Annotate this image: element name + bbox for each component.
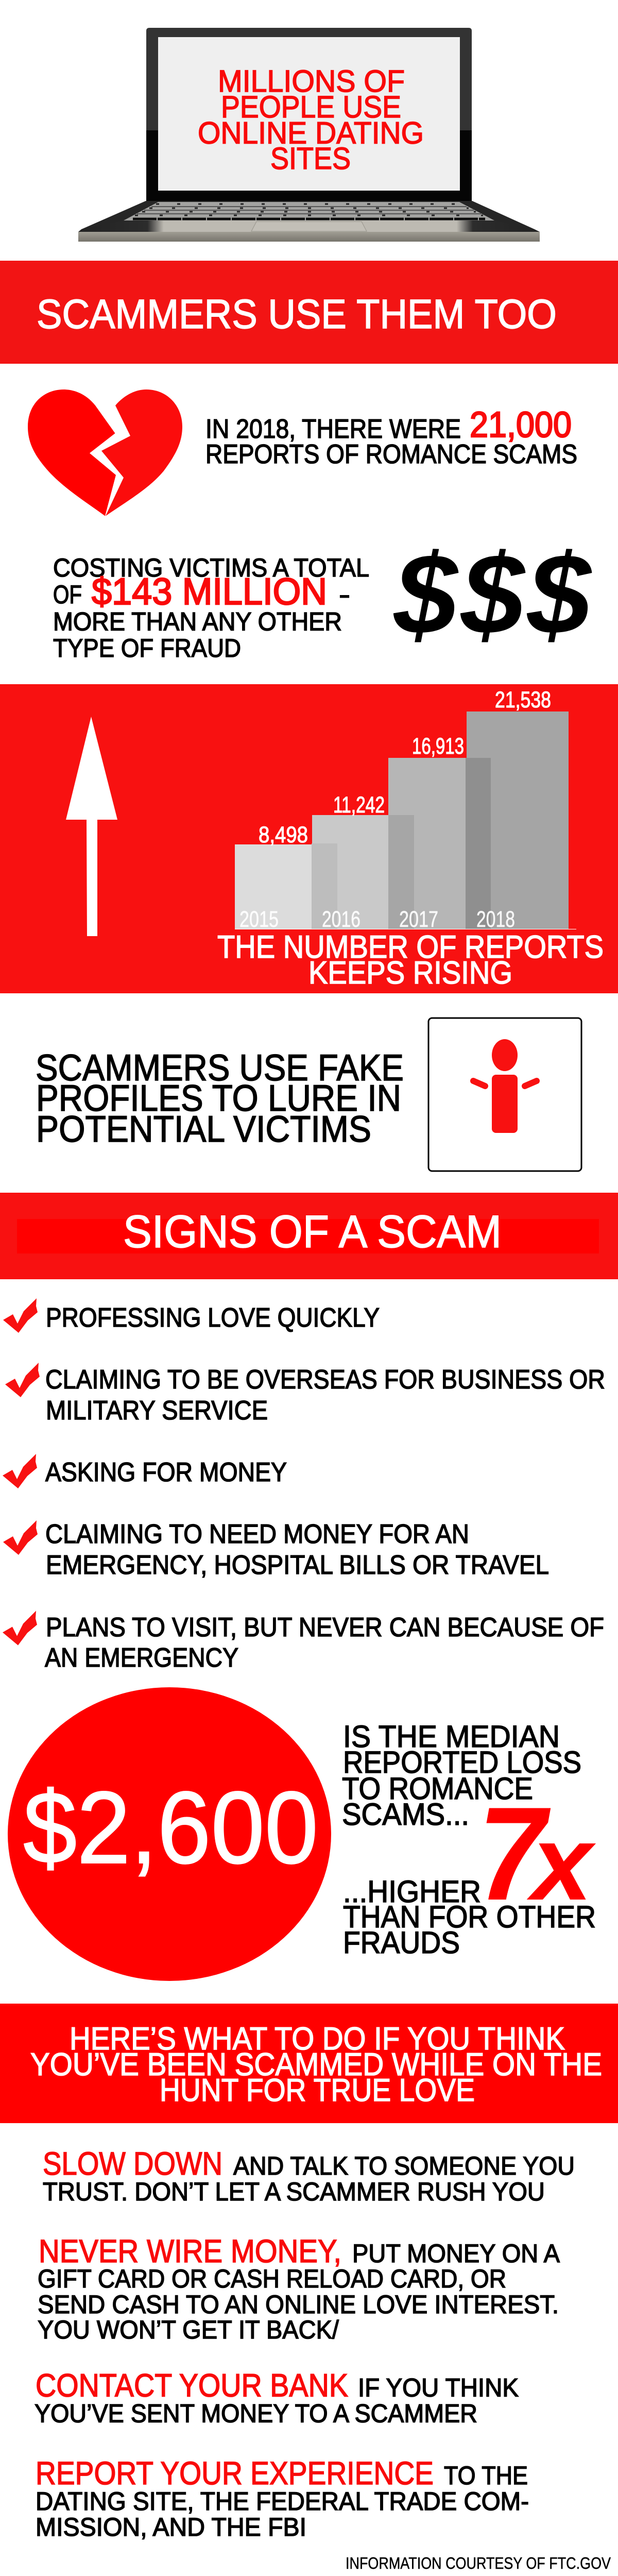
tip: report your experience: REPORT YOUR EXPERIENCE (36, 2455, 434, 2492)
laptop illustration (78, 28, 540, 242)
bar chart: 2017 (399, 907, 438, 932)
tip: contact your bank: CONTACT YOUR BANK (36, 2368, 348, 2404)
chart caption: KEEPS RISING (308, 955, 512, 991)
icon: fake profile (428, 1018, 581, 1171)
text: fake profiles: PROFILES TO LURE IN (36, 1078, 401, 1119)
tip: slow down: SLOW DOWN (43, 2146, 222, 2182)
sign 5: AN EMERGENCY (45, 1643, 238, 1673)
stat: $143 million (53, 553, 369, 663)
stat: 21,000 reports: 21,000 (470, 404, 572, 445)
banner: signs of a scam (0, 1193, 618, 1279)
sign 4: CLAIMING TO NEED MONEY FOR AN (45, 1519, 469, 1549)
tip: contact your bank: YOU’VE SENT MONEY TO A SCAMMER (35, 2399, 477, 2428)
icon: dollar signs: $ (460, 531, 526, 658)
sign 5 (3, 1611, 604, 1673)
bar chart: 2015 (239, 907, 279, 932)
bar chart (235, 687, 576, 932)
tip: never wire money: YOU WON’T GET IT BACK/ (38, 2315, 339, 2344)
text: median reported loss: IS THE MEDIAN (343, 1719, 560, 1754)
sign 3: ASKING FOR MONEY (45, 1458, 287, 1487)
bar chart: 2016 (322, 907, 360, 932)
text: median reported loss: REPORTED LOSS (343, 1745, 581, 1780)
sign 2 (5, 1363, 605, 1426)
tip: never wire money: PUT MONEY ON A (352, 2239, 560, 2268)
chart caption (217, 929, 604, 991)
icon: broken heart (28, 389, 182, 516)
tip: never wire money: GIFT CARD OR CASH RELOAD CARD, OR (38, 2264, 506, 2293)
laptop base strip (78, 232, 540, 242)
banner: scammers use them too: SCAMMERS USE THEM TOO (37, 291, 557, 337)
panel: number of reports (0, 684, 618, 993)
banner: what to do: HUNT FOR TRUE LOVE (160, 2073, 475, 2108)
text: median reported loss: ...HIGHER (343, 1874, 481, 1909)
stat: 21,000 reports (205, 404, 577, 469)
bar chart: 11,242 (333, 792, 385, 818)
stat: 7x: x (526, 1804, 596, 1922)
banner: what to do (0, 2004, 618, 2123)
stat: 21,000 reports: IN 2018, THERE WERE (205, 414, 461, 444)
laptop deck (81, 201, 535, 229)
laptop lid (146, 28, 472, 201)
palm rest (78, 221, 540, 232)
laptop headline: PEOPLE USE (221, 90, 401, 124)
tip: slow down (43, 2146, 575, 2206)
icon: dollar signs (393, 531, 592, 658)
tip: contact your bank: IF YOU THINK (358, 2373, 519, 2402)
banner: what to do: HERE’S WHAT TO DO IF YOU THINK (70, 2021, 565, 2057)
sign 2: MILITARY SERVICE (46, 1396, 268, 1426)
tip: report your experience: TO THE (444, 2461, 528, 2490)
bar chart: 8,498 (259, 822, 308, 848)
arrow: rising (66, 717, 117, 936)
laptop headline: SITES (270, 141, 351, 176)
stat: $143 million: $143 MILLION (92, 571, 327, 613)
tip: report your experience: MISSION, AND THE FBI (36, 2513, 306, 2541)
stat: 7x: 7 (478, 1779, 553, 1928)
sign 4: EMERGENCY, HOSPITAL BILLS OR TRAVEL (46, 1550, 549, 1580)
text: median reported loss: THAN FOR OTHER (343, 1900, 596, 1934)
sign 4 (3, 1519, 549, 1580)
stat: 7x (478, 1779, 596, 1928)
touchpad (251, 222, 367, 231)
lid lower shade (146, 130, 472, 201)
text: median reported loss: TO ROMANCE (342, 1771, 533, 1806)
tip: contact your bank (35, 2368, 519, 2428)
tip: never wire money: NEVER WIRE MONEY, (39, 2233, 341, 2269)
tip: slow down: TRUST. DON’T LET A SCAMMER RUSH YOU (43, 2177, 545, 2206)
stat: $143 million: - (339, 580, 350, 609)
bar chart: 16,913 (412, 734, 464, 759)
sign 1: PROFESSING LOVE QUICKLY (46, 1303, 380, 1333)
tip: report your experience (36, 2455, 529, 2541)
laptop headline (198, 64, 424, 176)
stat: $143 million: OF (53, 580, 82, 609)
text: median reported loss: FRAUDS (343, 1925, 460, 1960)
sign 3 (3, 1454, 287, 1488)
laptop headline: MILLIONS OF (218, 64, 405, 98)
text: fake profiles: POTENTIAL VICTIMS (36, 1109, 371, 1150)
text: fake profiles: SCAMMERS USE FAKE (36, 1047, 404, 1089)
text: fake profiles (36, 1047, 404, 1150)
keyboard (124, 202, 494, 221)
laptop screen (158, 37, 460, 191)
bar chart: 2018 (476, 907, 515, 932)
tip: never wire money: SEND CASH TO AN ONLINE LOVE INTEREST. (38, 2290, 559, 2319)
callout: $2,600 circle: $2,600 (23, 1771, 318, 1885)
tip: report your experience: DATING SITE, THE FEDERAL TRADE COM- (36, 2487, 529, 2516)
checklist: signs (3, 1298, 605, 1673)
callout: $2,600 circle (8, 1687, 331, 1981)
stat: $143 million: COSTING VICTIMS A TOTAL (53, 553, 369, 582)
tip: slow down: AND TALK TO SOMEONE YOU (233, 2151, 575, 2180)
banner: signs of a scam: SIGNS OF A SCAM (123, 1206, 502, 1257)
bar chart: 21,538 (495, 687, 551, 713)
tip: never wire money (38, 2233, 560, 2344)
stat: 21,000 reports: REPORTS OF ROMANCE SCAMS (205, 439, 577, 469)
sign 1 (3, 1298, 380, 1333)
laptop headline: ONLINE DATING (198, 115, 424, 150)
banner: scammers use them too (0, 261, 618, 364)
text: median reported loss: SCAMS... (342, 1797, 469, 1832)
stat: $143 million: TYPE OF FRAUD (53, 634, 241, 663)
text: median reported loss (342, 1719, 596, 1960)
icon: dollar signs: $ (393, 531, 459, 658)
icon: dollar signs: $ (526, 531, 592, 658)
stat: $143 million: MORE THAN ANY OTHER (53, 607, 342, 636)
